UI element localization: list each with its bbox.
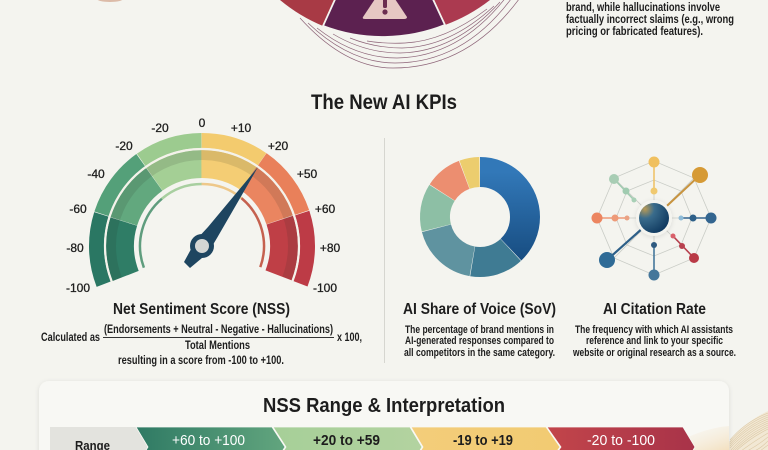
gauge scale labels: -80 <box>66 241 84 255</box>
panel heading: NSS Range & Interpretation <box>263 394 505 417</box>
NSS formula: Calculated as <box>41 332 100 344</box>
NSS formula: Total Mentions <box>185 340 250 352</box>
gauge scale labels: -20 <box>151 121 169 135</box>
gauge scale labels: -100 <box>313 281 337 295</box>
gauge scale labels: -40 <box>87 167 105 181</box>
panel card <box>39 381 729 450</box>
gauge scale labels: -20 <box>115 139 133 153</box>
gauge scale labels: +50 <box>297 167 318 181</box>
gauge thin inner arc <box>115 159 289 333</box>
range: +20 to +59 <box>273 427 422 450</box>
top-left icon remnant <box>97 0 123 2</box>
text: citation rate description: reference and link to your specific <box>586 335 723 347</box>
range: +60 to +100 <box>136 427 285 450</box>
dial red sector <box>280 0 335 26</box>
decorative corner waves <box>728 411 768 450</box>
vertical divider <box>384 138 385 363</box>
top risk dial <box>280 0 490 37</box>
gauge scale labels: -100 <box>66 281 90 295</box>
heading: net sentiment score: Net Sentiment Score (NSS) <box>113 301 290 318</box>
heading: AI share of voice: AI Share of Voice (SoV) <box>403 301 556 318</box>
icon: warning triangle <box>363 0 407 19</box>
network nodes <box>592 156 716 280</box>
gauge scale labels: +60 <box>315 202 336 216</box>
range: -20 to -100: -20 to -100 <box>587 433 655 449</box>
gauge chart: net sentiment score <box>55 99 349 393</box>
range: -20 to -100 <box>547 427 695 450</box>
NSS formula: (Endorsements + Neutral - Negative - Hallucinations) <box>104 324 333 336</box>
text: share of voice description <box>404 324 555 359</box>
network spokes <box>597 162 711 275</box>
heading: AI citation rate: AI Citation Rate <box>603 301 706 318</box>
gauge inner band <box>88 132 316 360</box>
NSS formula: resulting in a score from -100 to +100. <box>118 355 284 367</box>
dial purple sector <box>323 0 445 37</box>
gauge outer band <box>55 99 349 393</box>
NSS formula <box>41 324 362 367</box>
gauge needle <box>184 167 258 268</box>
donut chart: share of voice <box>416 153 544 281</box>
heading: The New AI KPIs: The New AI KPIs <box>311 91 457 114</box>
network diagram: citation rate <box>592 156 716 280</box>
gauge scale labels: -60 <box>69 202 87 216</box>
range: +20 to +59: +20 to +59 <box>313 433 380 449</box>
decorative swoosh lines under dial <box>300 0 522 68</box>
gauge band shading <box>84 128 320 364</box>
network web <box>597 161 711 275</box>
top-right explanation text <box>566 0 734 38</box>
text: share of voice description: AI-generated responses compared to <box>405 335 554 347</box>
dial right sector <box>433 0 490 25</box>
panel: NSS range and interpretation <box>39 381 729 450</box>
text: share of voice description: The percentage of brand mentions in <box>405 324 554 336</box>
NSS formula: x 100, <box>337 332 362 344</box>
text: citation rate description <box>572 324 736 359</box>
network central globe <box>636 200 672 236</box>
top-right explanation text: pricing or fabricated features). <box>566 24 703 38</box>
gauge scale labels: +10 <box>231 121 252 135</box>
range header cell <box>50 427 148 450</box>
top-right explanation text: brand, while hallucinations involve <box>566 0 720 14</box>
range: -19 to +19: -19 to +19 <box>453 433 513 449</box>
range: -19 to +19 <box>411 427 560 450</box>
gauge white separator ring <box>77 121 327 371</box>
gauge scale labels: +80 <box>320 241 341 255</box>
gauge scale labels <box>66 116 341 295</box>
range: +60 to +100: +60 to +100 <box>172 433 245 449</box>
text: share of voice description: all competitors in the same category. <box>404 347 555 359</box>
gauge scale labels: +20 <box>268 139 289 153</box>
panel warm corner glow <box>660 426 729 450</box>
gauge scale labels: 0 <box>199 116 206 130</box>
